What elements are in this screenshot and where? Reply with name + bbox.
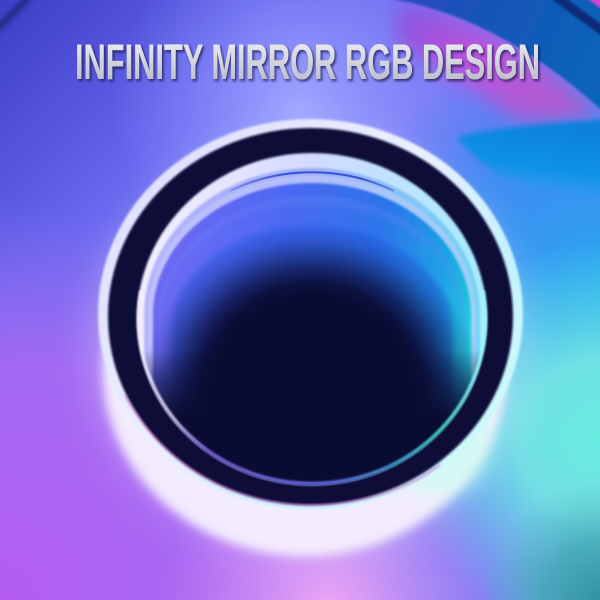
white glow around fan [95, 140, 525, 550]
mirror reflections [144, 168, 480, 500]
lit mirror edge [135, 290, 489, 487]
dark outer ring [108, 128, 513, 505]
outer white ring [98, 119, 523, 509]
top right blades [0, 0, 600, 195]
dark mirror depth [148, 231, 476, 485]
fan body lower cylinder [103, 184, 507, 556]
magenta lower rim [125, 395, 440, 505]
infinity mirror opening [130, 150, 495, 500]
top reflection line [230, 172, 394, 191]
